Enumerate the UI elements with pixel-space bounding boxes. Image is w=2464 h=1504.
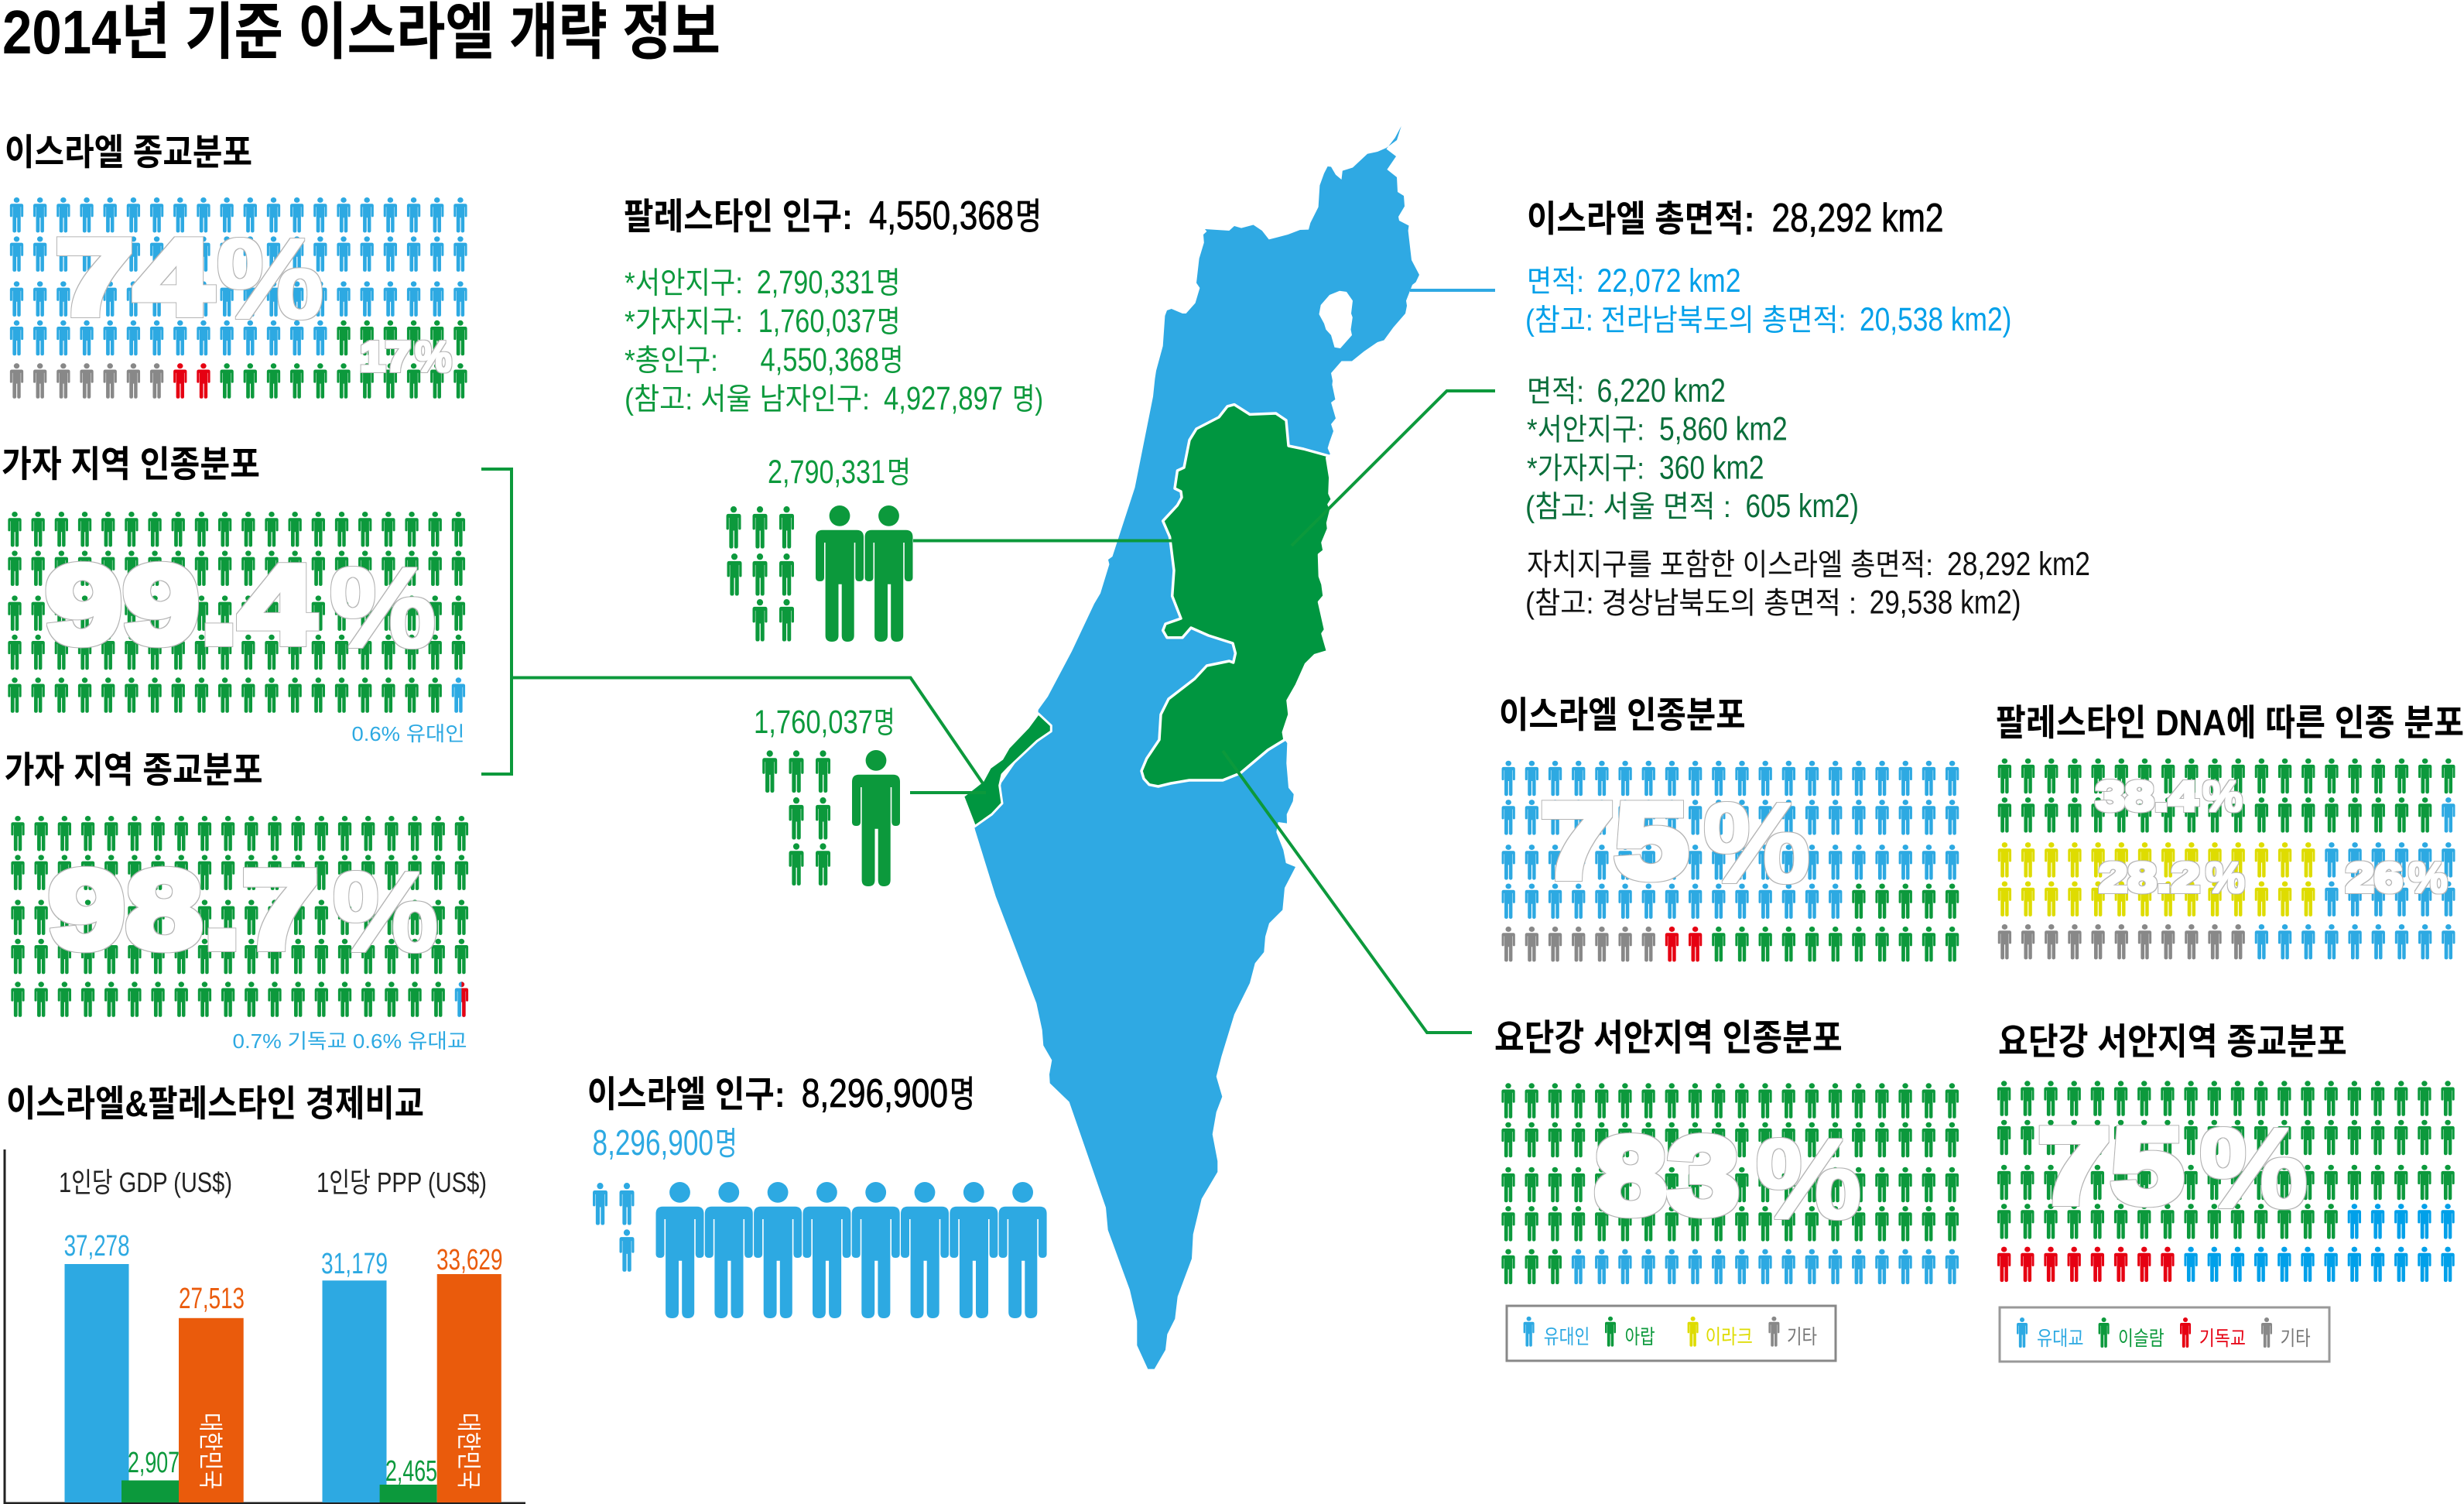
small people (593, 1183, 635, 1272)
value: 2,790,331 (768, 454, 885, 491)
heading: 8,296,900 (802, 1071, 948, 1116)
heading: 이스라엘 종교분포 (5, 132, 252, 173)
reference: (참고: 서울 남자인구: (625, 383, 870, 416)
panel: Israel area text (1525, 196, 2090, 622)
connector: Gaza people line (910, 791, 986, 794)
chart heading: 1인당 GDP (US$) (59, 1167, 232, 1198)
Seoul area reference: (참고: 서울 면적 : (1525, 491, 1731, 524)
bar: Palestine (380, 1485, 437, 1502)
heading: 이스라엘 인종분포 (1499, 694, 1746, 735)
panel: Israel race distribution (1499, 694, 1959, 961)
caption: 0.6% 유대인 (351, 722, 464, 745)
value: 8,296,900 (593, 1122, 714, 1163)
percentage 83%: 83 (1594, 1115, 1740, 1238)
value: 1,760,037 (754, 704, 873, 741)
bar: Israel (322, 1280, 387, 1502)
chart: GDP per capita (59, 1167, 245, 1502)
heading: 이스라엘 총면적: (1527, 198, 1755, 239)
West Bank population: *서안지구: (625, 267, 743, 300)
map region: Israel (974, 126, 1419, 1369)
Seoul area reference: 605 km2) (1746, 488, 1859, 525)
chart: PPP per capita (317, 1167, 503, 1502)
connector: Palestinian area line (1292, 391, 1495, 546)
legend item other (2261, 1317, 2311, 1350)
reference: 명) (1012, 383, 1043, 416)
percentage 28.2%: 28.2 (2099, 855, 2200, 901)
panel: West Bank population pictogram (726, 454, 913, 642)
percentage 74%: % (216, 215, 324, 343)
total area: 28,292 km2 (1947, 546, 2090, 583)
percentage 99.4%: % (329, 544, 436, 672)
West Bank population: 명 (876, 267, 901, 300)
percentage 75%: 75 (2038, 1106, 2184, 1226)
Gaza population: 명 (877, 306, 901, 339)
Israel area: 면적: (1527, 266, 1584, 299)
total population: *총인구: (625, 344, 718, 378)
total area reference: (참고: 경상남북도의 총면적 : (1525, 588, 1857, 621)
legend item Islam: 이슬람 (2118, 1327, 2165, 1350)
pictogram grid (11, 816, 468, 1017)
value 31,179: 31,179 (321, 1248, 388, 1280)
total population: 명 (880, 344, 904, 378)
value: 명 (887, 457, 911, 490)
value 33,629: 33,629 (436, 1244, 503, 1276)
pictogram grid (1501, 1083, 1959, 1284)
percentage 98.7%: 98.7 (48, 847, 319, 972)
value 2,907: 2,907 (128, 1447, 180, 1479)
panel: Israel religion distribution (5, 132, 467, 399)
total area reference: 29,538 km2) (1870, 584, 2021, 622)
percentage 38.4%: 38.4 (2096, 773, 2198, 820)
Palestinian area: 면적: (1527, 375, 1584, 409)
percentage 99.4%: 99.4 (45, 542, 316, 667)
legend item Arab (1605, 1317, 1655, 1348)
pictogram grid (1502, 761, 1959, 961)
percentage 26%: % (2408, 853, 2448, 903)
heading: 28,292 km2 (1772, 196, 1944, 241)
heading: 4,550,368 (869, 194, 1014, 238)
West Bank area: 5,860 km2 (1659, 411, 1788, 448)
panel: Palestinian DNA race distribution (1996, 702, 2464, 959)
panel: Palestinian population text (624, 194, 1043, 417)
value 37,278: 37,278 (64, 1230, 130, 1262)
chart axes (5, 1149, 525, 1503)
heading: 이스라엘 인구: (587, 1074, 785, 1115)
connector: Gaza bracket line (481, 469, 983, 783)
legend: race (1507, 1306, 1836, 1361)
connector: Israel area line (1410, 289, 1495, 292)
Gaza area: 360 km2 (1659, 449, 1764, 486)
caption: 0.7% 기독교 0.6% 유대교 (232, 1030, 467, 1053)
legend item other (1768, 1317, 1817, 1348)
heading: 명 (950, 1074, 975, 1115)
bar: Korea (179, 1318, 244, 1502)
heading: 요단강 서안지역 종교분포 (1998, 1021, 2347, 1062)
heading: 이스라엘&팔레스타인 경제비교 (6, 1083, 424, 1124)
legend box (1507, 1306, 1836, 1361)
legend item Christianity: 기독교 (2199, 1327, 2246, 1350)
percentage 38.4%: % (2202, 772, 2243, 821)
percentage 26%: 26 (2346, 855, 2403, 901)
pictogram grid (1997, 1081, 2455, 1282)
legend: religion (2000, 1307, 2329, 1362)
pictogram grid (10, 197, 467, 399)
Israel area: 22,072 km2 (1597, 262, 1741, 300)
legend item Judaism: 유대교 (2037, 1327, 2083, 1350)
percentage 98.7%: % (332, 848, 439, 976)
connector: Jordan West Bank distribution line (1223, 751, 1472, 1033)
value: 명 (874, 707, 895, 740)
heading: 요단강 서안지역 인종분포 (1494, 1017, 1843, 1058)
pictogram grid (1998, 759, 2455, 959)
total area: 자치지구를 포함한 이스라엘 총면적: (1527, 549, 1933, 582)
map: Israel and Palestinian territories (963, 126, 1419, 1369)
percentage 17%: 17 (360, 334, 411, 380)
legend item Jewish (1524, 1317, 1590, 1348)
legend item Arab: 아랍 (1625, 1325, 1655, 1348)
value: 명 (715, 1125, 737, 1162)
legend box (2000, 1307, 2329, 1362)
Palestinian area: 6,220 km2 (1597, 372, 1726, 409)
chart heading: 1인당 PPP (US$) (317, 1167, 487, 1198)
small people (726, 506, 794, 642)
legend item Jewish: 유대인 (1544, 1325, 1590, 1348)
Israel area reference: (참고: 전라남북도의 총면적: (1525, 304, 1846, 337)
percentage 74%: 74 (55, 218, 213, 337)
Gaza population: 1,760,037 (758, 303, 876, 340)
legend item Iraq (1688, 1317, 1753, 1348)
label Korea: 대한민국 (197, 1413, 224, 1489)
percentage 75%: % (2199, 1105, 2308, 1232)
legend item other: 기타 (1787, 1325, 1817, 1348)
legend item Islam (2099, 1317, 2165, 1350)
bar: Korea (437, 1274, 501, 1502)
value 2,465: 2,465 (385, 1455, 437, 1488)
value 27,513: 27,513 (179, 1283, 245, 1315)
reference: 4,927,897 (884, 380, 1003, 417)
panel: Gaza religion distribution (5, 749, 468, 1053)
total population: 4,550,368 (760, 341, 879, 379)
heading: 팔레스타인 인구: (624, 196, 853, 237)
legend item Judaism (2017, 1317, 2083, 1350)
percentage 75%: % (1703, 779, 1811, 907)
percentage 28.2%: % (2206, 853, 2245, 903)
large people (816, 505, 913, 642)
connector: West Bank people line (913, 539, 1172, 542)
panel: Gaza population pictogram (754, 704, 900, 886)
panel: Gaza race distribution (2, 444, 465, 745)
percentage 75%: 75 (1540, 781, 1689, 901)
Israel area reference: 20,538 km2) (1860, 301, 2011, 338)
bar: Palestine (121, 1480, 179, 1502)
map region: Gaza Strip (963, 714, 1051, 827)
legend item other: 기타 (2281, 1327, 2311, 1350)
large people (656, 1182, 1047, 1318)
heading: 가자 지역 인종분포 (2, 444, 260, 485)
legend item Iraq: 이라크 (1706, 1325, 1753, 1348)
legend item Christianity (2180, 1317, 2246, 1350)
percentage 83%: % (1755, 1115, 1862, 1243)
pictogram grid (8, 512, 465, 713)
West Bank population: 2,790,331 (757, 264, 874, 301)
Gaza area: *가자지구: (1527, 452, 1644, 485)
label Korea: 대한민국 (455, 1413, 483, 1489)
West Bank area: *서안지구: (1527, 414, 1644, 447)
panel: Jordan West Bank religion distribution (1997, 1021, 2455, 1362)
heading: 가자 지역 종교분포 (5, 749, 263, 790)
large person (852, 750, 900, 886)
bar: Israel (65, 1264, 128, 1502)
Gaza population: *가자지구: (625, 306, 743, 339)
heading: 명 (1015, 196, 1042, 237)
map region: West Bank (1141, 405, 1332, 786)
panel: Jordan West Bank race distribution (1494, 1017, 1959, 1361)
percentage 17%: % (415, 332, 452, 382)
panel: Israel population (587, 1071, 1047, 1318)
panel: economy comparison (5, 1083, 525, 1503)
small people (762, 750, 830, 886)
